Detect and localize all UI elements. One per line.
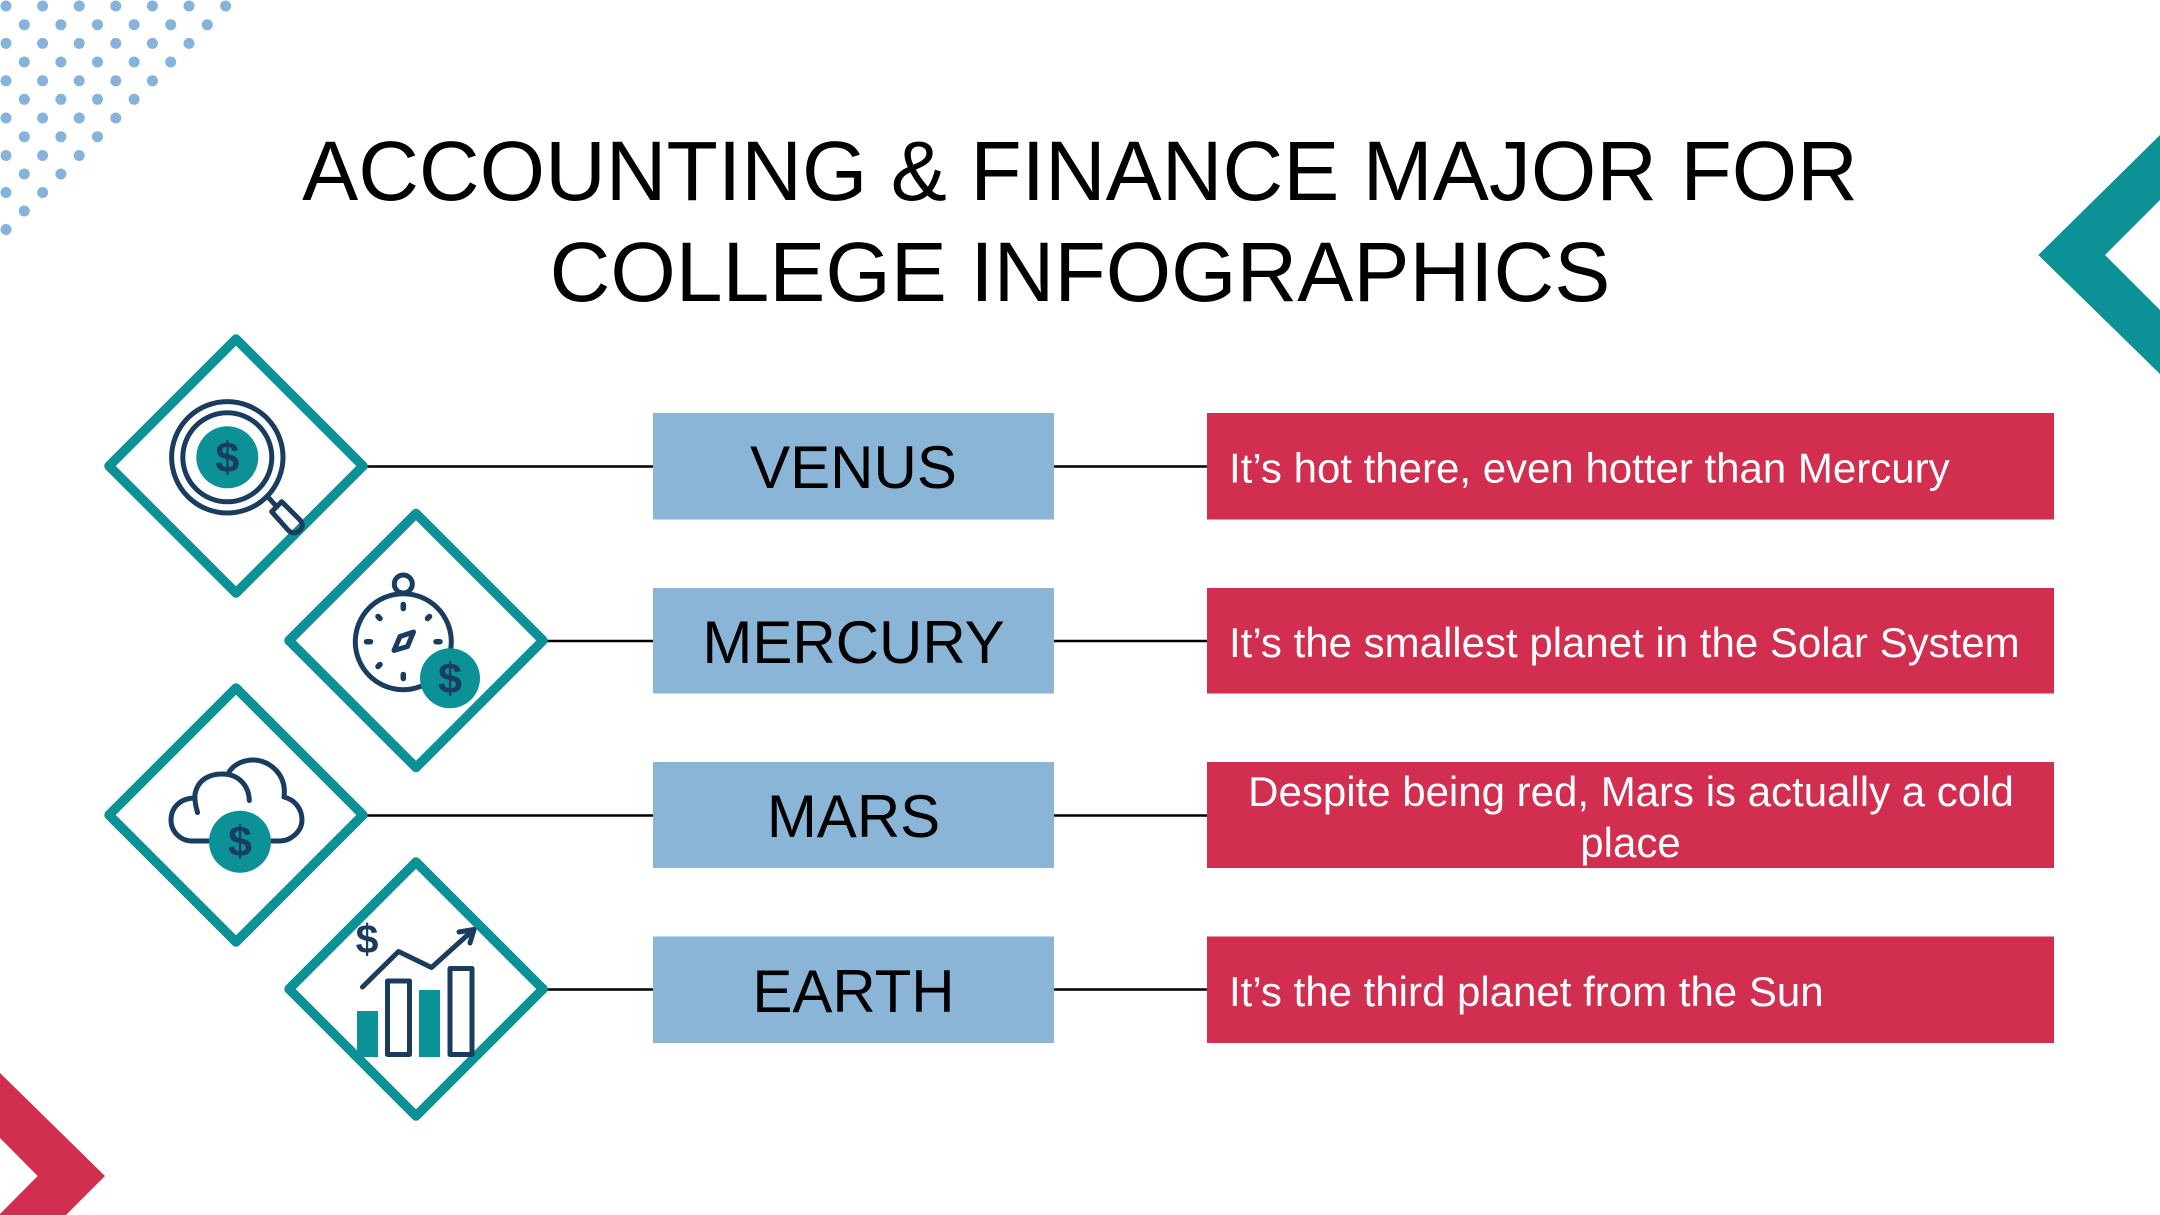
- chevron: red bottom-left: [0, 1073, 105, 1215]
- row: Earth description: It’s the third planet from the Sun: [1229, 968, 1824, 1015]
- row: Venus description: [1207, 413, 2054, 520]
- connector lines: [365, 466, 1207, 990]
- row: Earth label: EARTH: [752, 958, 955, 1025]
- title: ACCOUNTING & FINANCE MAJOR FOR: [302, 124, 1858, 218]
- diamond icon: bar chart with dollar: [289, 862, 543, 1116]
- row: Venus description: It’s hot there, even hotter than Mercury: [1229, 444, 1950, 492]
- row: Venus label: [653, 413, 1054, 520]
- row: Mars label: [653, 762, 1054, 868]
- diamond icon: cloud with dollar: $: [228, 818, 252, 866]
- diamond icon: magnifying glass with dollar: [109, 339, 363, 593]
- title: [302, 124, 1858, 319]
- row: Earth description: [1207, 936, 2054, 1043]
- row: Mars description: Despite being red, Mars is actually a cold: [1248, 768, 2014, 815]
- diamond icon: magnifying glass with dollar: $: [215, 434, 239, 482]
- row: Mars label: MARS: [767, 783, 940, 850]
- diamond icon: compass with dollar: $: [438, 655, 462, 703]
- chevron: teal top-right: [2038, 135, 2160, 374]
- row: Mars description: [1207, 762, 2054, 868]
- diamond icon: bar chart with dollar: $: [356, 916, 379, 962]
- row: Venus label: VENUS: [750, 434, 957, 501]
- title: COLLEGE INFOGRAPHICS: [550, 225, 1610, 319]
- diamond icon: cloud with dollar: [109, 688, 363, 942]
- row: Mars description: place: [1580, 819, 1681, 866]
- row: Mercury label: MERCURY: [702, 609, 1005, 676]
- diamond icon: compass with dollar: [289, 514, 543, 768]
- row: Mercury label: [653, 588, 1054, 694]
- row: Mercury description: It’s the smallest planet in the Solar System: [1229, 619, 2020, 666]
- row: Mercury description: [1207, 588, 2054, 694]
- row: Earth label: [653, 936, 1054, 1043]
- dot pattern top-left: [0, 0, 231, 235]
